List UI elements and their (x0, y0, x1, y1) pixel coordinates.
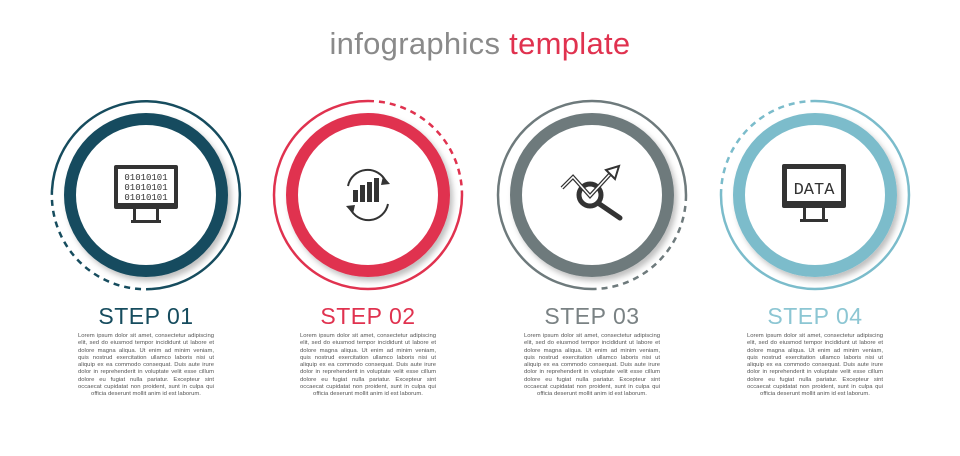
step 2 text (300, 303, 436, 397)
icon: data monitor: DATA (794, 181, 835, 200)
icon: binary monitor (114, 165, 178, 223)
step 4 text: STEP 04 (767, 303, 863, 329)
icon: magnifier chart (562, 166, 620, 218)
step 1 text: STEP 01 (98, 303, 194, 329)
step 1 text (78, 303, 214, 397)
circle 1 (52, 101, 240, 289)
circle 2 (274, 101, 462, 289)
step 2 text: STEP 02 (320, 303, 416, 329)
step 4 text (747, 303, 883, 397)
icon: binary monitor: 01010101 (124, 183, 168, 193)
step 3 text: Lorem ipsum dolor sit amet, consectetur adipiscing elit, sed do eiusmod tempor incididunt ut labore et dolore magna aliqua. Ut enim ad minim veniam, quis nostrud exercitation ullamco laboris nisi ut aliquip ex ea commodo consequat. Duis aute irure dolor in reprehenderit in voluptate velit esse cillum dolore eu fugiat nulla pariatur. Excepteur sint occaecat cupidatat non proident, sunt in culpa qui officia deserunt mollit anim id est laborum. (524, 333, 660, 397)
icon: binary monitor: 01010101 (124, 173, 168, 183)
step 3 text (524, 303, 660, 397)
circle 3 (498, 101, 686, 289)
icon: bar chart refresh (346, 170, 390, 220)
circle 4 (721, 101, 909, 289)
step 1 text: Lorem ipsum dolor sit amet, consectetur adipiscing elit, sed do eiusmod tempor incididunt ut labore et dolore magna aliqua. Ut enim ad minim veniam, quis nostrud exercitation ullamco laboris nisi ut aliquip ex ea commodo consequat. Duis aute irure dolor in reprehenderit in voluptate velit esse cillum dolore eu fugiat nulla pariatur. Excepteur sint occaecat cupidatat non proident, sunt in culpa qui officia deserunt mollit anim id est laborum. (78, 333, 214, 397)
icon: data monitor (782, 164, 846, 222)
title: infographics template (330, 26, 630, 61)
icon: binary monitor: 01010101 (124, 193, 168, 203)
step 2 text: Lorem ipsum dolor sit amet, consectetur adipiscing elit, sed do eiusmod tempor incididunt ut labore et dolore magna aliqua. Ut enim ad minim veniam, quis nostrud exercitation ullamco laboris nisi ut aliquip ex ea commodo consequat. Duis aute irure dolor in reprehenderit in voluptate velit esse cillum dolore eu fugiat nulla pariatur. Excepteur sint occaecat cupidatat non proident, sunt in culpa qui officia deserunt mollit anim id est laborum. (300, 333, 436, 397)
step 4 text: Lorem ipsum dolor sit amet, consectetur adipiscing elit, sed do eiusmod tempor incididunt ut labore et dolore magna aliqua. Ut enim ad minim veniam, quis nostrud exercitation ullamco laboris nisi ut aliquip ex ea commodo consequat. Duis aute irure dolor in reprehenderit in voluptate velit esse cillum dolore eu fugiat nulla pariatur. Excepteur sint occaecat cupidatat non proident, sunt in culpa qui officia deserunt mollit anim id est laborum. (747, 333, 883, 397)
step 3 text: STEP 03 (544, 303, 640, 329)
